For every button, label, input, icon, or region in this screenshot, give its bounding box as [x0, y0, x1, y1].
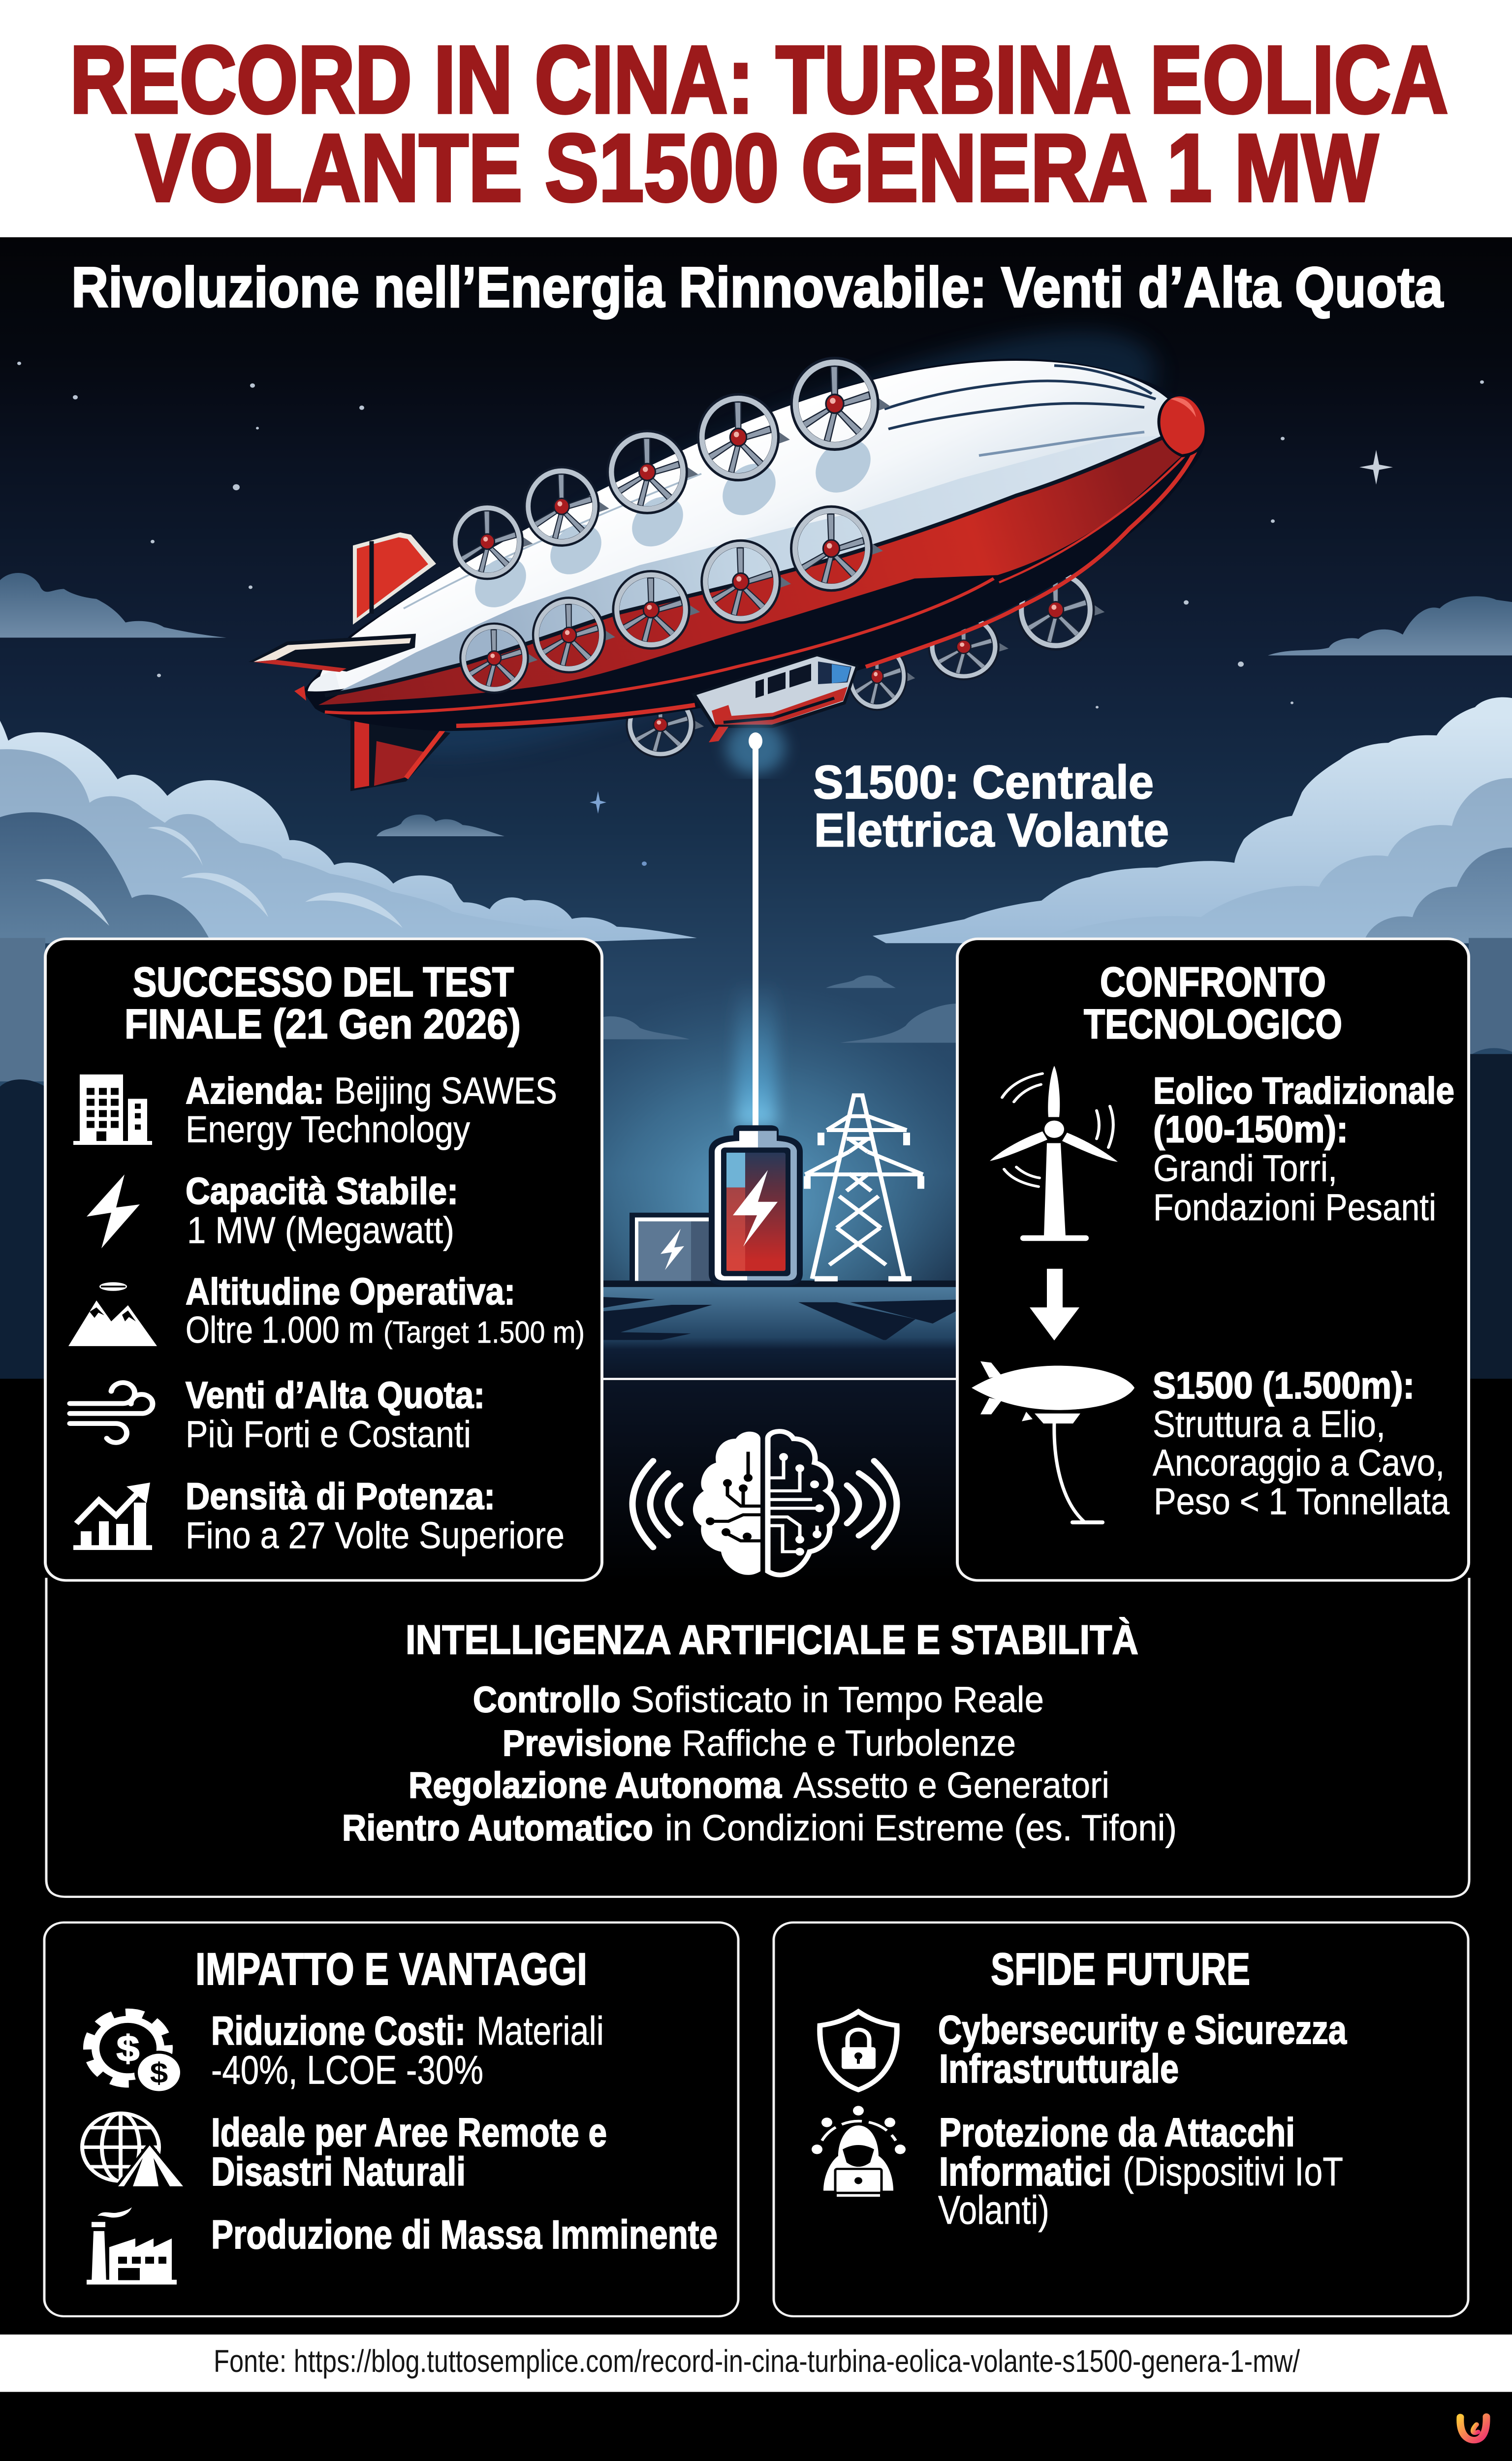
- AI bullet lines: Rientro Automatico: [342, 1807, 653, 1848]
- airship: [249, 258, 1210, 828]
- hull red stripes: [325, 439, 1201, 726]
- item: remote areas: Disastri Naturali: [211, 2149, 466, 2194]
- lower centre fade: [603, 1380, 957, 1582]
- AI bullet lines: [342, 1679, 1177, 1848]
- item: cybersecurity: [938, 2008, 1347, 2091]
- icon: signal waves left: [632, 1461, 680, 1547]
- panel box: [45, 939, 602, 1580]
- item: cost reduction: Riduzione Costi:: [211, 2009, 466, 2053]
- item: power density: [186, 1476, 565, 1556]
- S1500 label: Elettrica Volante: [814, 804, 1169, 856]
- hull panel lines: [404, 366, 1156, 608]
- scene: night sky: [0, 237, 1512, 1379]
- panel heading: [125, 959, 521, 1047]
- item: S1500: Struttura a Elio,: [1153, 1404, 1386, 1445]
- hull seam: [325, 435, 1169, 695]
- item: power density: Densità di Potenza:: [186, 1476, 495, 1517]
- icon: factory: [87, 2207, 177, 2284]
- lower tail fin: [350, 717, 450, 791]
- item: company: Energy Technology: [186, 1109, 470, 1151]
- item: remote areas: Ideale per Aree Remote e: [211, 2111, 607, 2155]
- tail cone: [308, 669, 340, 692]
- item: altitude: Altitudine Operativa:: [186, 1271, 515, 1313]
- second row fans: [463, 509, 883, 690]
- panel heading: IMPATTO E VANTAGGI: [195, 1944, 587, 1994]
- gondola: [692, 654, 859, 742]
- AI bullet lines: in Condizioni Estreme (es. Tifoni): [665, 1807, 1177, 1848]
- item: capacity: [186, 1171, 458, 1251]
- item: cost reduction: [211, 2009, 604, 2092]
- AI bullet lines: Previsione: [503, 1722, 671, 1764]
- item: mass production: Produzione di Massa Imminente: [211, 2212, 718, 2257]
- icon: globe and tent: [82, 2114, 188, 2190]
- panel heading: [1084, 959, 1342, 1047]
- panel: impact and benefits: [44, 1923, 738, 2316]
- tail tip: [294, 686, 306, 701]
- scene divider: [600, 1378, 957, 1380]
- clouds: big right bank: [873, 697, 1512, 943]
- clouds: distant centre-right: [826, 976, 956, 1043]
- icon: signal waves right: [847, 1461, 897, 1547]
- icon: bolt: [87, 1174, 140, 1248]
- clouds: big left bank: [0, 721, 697, 943]
- item: winds: Più Forti e Costanti: [186, 1414, 471, 1455]
- hull white upper: [319, 361, 1171, 691]
- power cable beam: [726, 722, 785, 1126]
- battery: [709, 1125, 803, 1286]
- S1500 label: [813, 756, 1169, 856]
- source footer: [0, 2335, 1512, 2392]
- item: power density: Fino a 27 Volte Superiore: [186, 1515, 565, 1556]
- item: winds: [186, 1375, 485, 1455]
- panel: test success: [45, 939, 602, 1580]
- nose cap: [1157, 394, 1208, 457]
- item: winds: Venti d’Alta Quota:: [186, 1375, 485, 1416]
- item: cyber attacks: [938, 2111, 1343, 2233]
- storage unit: [630, 1213, 713, 1281]
- icon: growth chart: [73, 1483, 152, 1550]
- icon: mountains: [68, 1282, 157, 1346]
- panel: tech comparison: [957, 939, 1469, 1580]
- top tail fin: [353, 533, 436, 625]
- S1500 label: S1500: Centrale: [813, 756, 1154, 809]
- item: altitude: Oltre 1.000 m: [186, 1309, 374, 1351]
- item: capacity: Capacità Stabile:: [186, 1171, 458, 1212]
- item: cost reduction: -40%, LCOE -30%: [211, 2048, 483, 2092]
- airship glow: [316, 258, 1210, 828]
- item: company: [186, 1071, 557, 1151]
- item: remote areas: [211, 2111, 607, 2194]
- title banner: [0, 0, 1512, 237]
- item: cybersecurity: Cybersecurity e Sicurezza: [938, 2008, 1347, 2052]
- item: traditional wind: (100-150m):: [1153, 1109, 1348, 1151]
- top row fans: [454, 361, 890, 576]
- panel box: [774, 1923, 1468, 2316]
- fan shadows on hull: [465, 430, 882, 616]
- panel box: [957, 939, 1469, 1580]
- clouds: dark side margins: [0, 938, 1512, 1379]
- underside fans: [629, 573, 1104, 755]
- side fin: [249, 634, 416, 672]
- clouds: distant centre-left: [603, 1016, 690, 1039]
- icon: cost gear: $: [150, 2057, 168, 2089]
- item: S1500: S1500 (1.500m):: [1153, 1365, 1415, 1407]
- stars: [17, 362, 1484, 866]
- panel heading: SUCCESSO DEL TEST: [133, 959, 514, 1006]
- clouds: small upper left: [0, 573, 226, 637]
- cloud highlights: [35, 826, 403, 928]
- item: altitude: (Target 1.500 m): [383, 1315, 585, 1349]
- item: altitude: [186, 1271, 585, 1351]
- icon: cost gear: [89, 2013, 184, 2094]
- AI bullet lines: Controllo: [473, 1679, 621, 1720]
- AI heading: INTELLIGENZA ARTIFICIALE E STABILITÀ: [406, 1616, 1138, 1663]
- item: traditional wind: Fondazioni Pesanti: [1153, 1187, 1436, 1229]
- item: company: Azienda:: [186, 1071, 324, 1112]
- item: cyber attacks: Protezione da Attacchi: [939, 2111, 1295, 2155]
- item: cost reduction: Materiali: [476, 2009, 604, 2053]
- item: cybersecurity: Infrastrutturale: [939, 2047, 1179, 2091]
- panel heading: SFIDE FUTURE: [991, 1944, 1250, 1994]
- item: cyber attacks: (Dispositivi IoT: [1123, 2149, 1343, 2194]
- panel heading: FINALE (21 Gen 2026): [125, 1001, 521, 1047]
- icon: blimp: [972, 1361, 1134, 1524]
- hull outline: [303, 359, 1206, 731]
- clouds: small centre: [377, 815, 504, 836]
- icon: hacker: [812, 2106, 906, 2197]
- item: company: Beijing SAWES: [334, 1071, 557, 1112]
- logo: [1460, 2417, 1486, 2440]
- panel box: [44, 1923, 738, 2316]
- icon: cost gear: $: [117, 2028, 139, 2069]
- AI bullet lines: Sofisticato in Tempo Reale: [631, 1679, 1044, 1720]
- hull shaded lower band: [340, 436, 1163, 691]
- pylon: [805, 1095, 923, 1279]
- item: traditional wind: [1153, 1071, 1454, 1229]
- clouds: small upper right: [1268, 596, 1512, 656]
- panel: AI and stability: [46, 1431, 1469, 1897]
- AI bullet lines: Regolazione Autonoma: [409, 1765, 782, 1805]
- ground: [603, 1281, 957, 1379]
- item: cyber attacks: Informatici: [939, 2149, 1111, 2194]
- icon: AI brain: [693, 1431, 837, 1575]
- AI bullet lines: Assetto e Generatori: [793, 1765, 1109, 1805]
- icon: wind: [70, 1383, 153, 1443]
- AI bullet lines: Raffiche e Turbolenze: [682, 1722, 1016, 1764]
- panel heading: TECNOLOGICO: [1084, 1001, 1342, 1047]
- icon: building: [73, 1074, 152, 1145]
- hull red lower: [318, 435, 1181, 705]
- item: S1500: [1153, 1365, 1450, 1523]
- icon: wind turbine: [990, 1066, 1118, 1241]
- panel: future challenges: [774, 1923, 1468, 2316]
- item: capacity: 1 MW (Megawatt): [187, 1210, 454, 1251]
- arrow: comparison: [1030, 1269, 1079, 1340]
- item: traditional wind: Grandi Torri,: [1153, 1148, 1337, 1189]
- item: cyber attacks: Volanti): [938, 2188, 1049, 2233]
- AI panel frame: [46, 1578, 1469, 1897]
- panel heading: CONFRONTO: [1100, 959, 1326, 1006]
- icon: shield: [820, 2012, 897, 2090]
